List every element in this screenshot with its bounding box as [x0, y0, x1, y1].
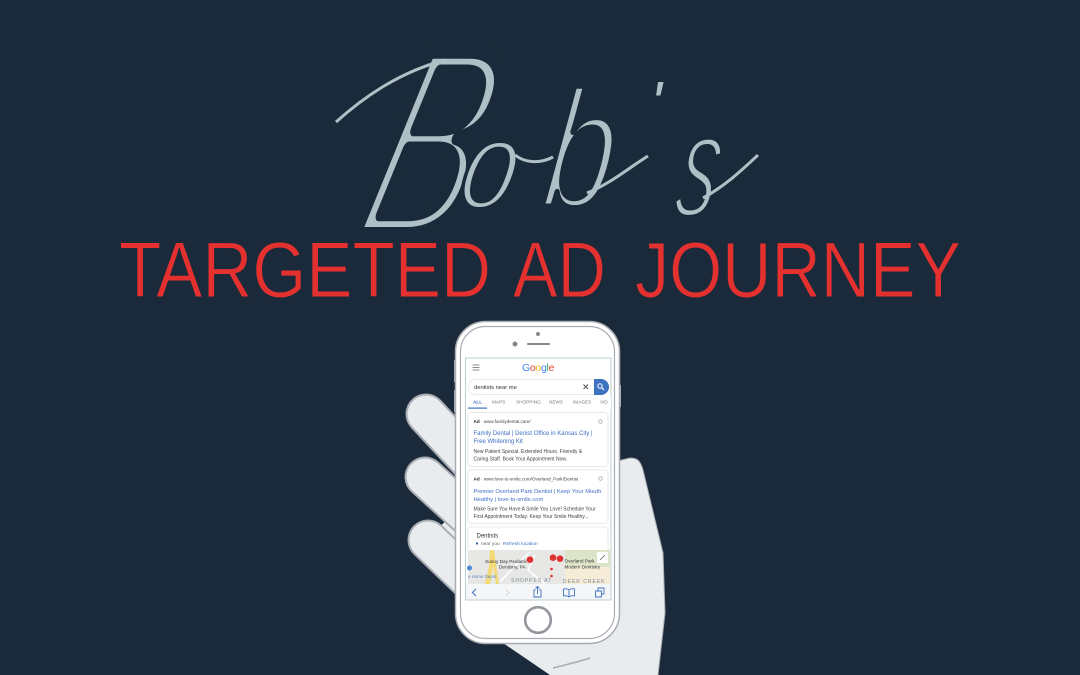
ad card 1: Caring Staff. Book Your Appointment Now.	[474, 456, 567, 462]
title: Targeted Ad Journey: TARGETED	[119, 226, 491, 314]
ad card 1: New Patient Special. Extended Hours. Friendly &	[474, 449, 583, 455]
ad card 1: Family Dental | Denist Office in Kansas City |	[474, 431, 593, 437]
Google logo: Google	[522, 362, 555, 374]
ad card 2: Healthy | love-to-smile.com	[474, 497, 543, 503]
title: Targeted Ad Journey	[119, 226, 961, 314]
title: Targeted Ad Journey: JOURNEY	[635, 226, 961, 314]
ad card 1	[468, 412, 608, 466]
palm crease	[553, 658, 590, 668]
tabs: ALL	[473, 400, 482, 404]
ad card 1: Free Whitening Kit	[474, 439, 523, 445]
finger 3	[428, 540, 480, 590]
ad card 2: Ad · www.love-to-smile.com/Overland_Park/Dentist	[474, 476, 579, 482]
script heading: Bob's: b	[536, 55, 629, 243]
script heading: Bob's: '	[650, 70, 664, 139]
title: Targeted Ad Journey: AD	[513, 226, 606, 314]
map	[467, 550, 610, 585]
ad card 2: Premier Overland Park Dentist | Keep Your Mouth	[474, 489, 601, 495]
illustration: hand holding phone	[415, 322, 665, 675]
phone body	[454, 322, 621, 644]
menu icon	[472, 365, 480, 370]
thumb outline	[618, 458, 665, 675]
map pins	[527, 554, 563, 577]
map: Overland Park	[564, 558, 595, 564]
tabs: NEWS	[549, 400, 563, 404]
ad card 2	[468, 470, 608, 524]
map: Sunny Day Pediatric	[485, 559, 528, 564]
tabs: VIDE	[600, 400, 611, 404]
ad card 2: First Appointment Today. Keep Your Smile Healthy...	[474, 514, 589, 520]
local results header: Refresh location	[503, 541, 538, 547]
map: Dentistry, PA	[499, 564, 527, 570]
ad card 2: Make Sure You Have A Smile You Love! Schedule Your	[474, 506, 596, 512]
tabs: MAPS	[492, 400, 505, 404]
script heading: Bob's: B	[336, 0, 530, 291]
finger 2	[425, 477, 480, 527]
map: DEER CREEK	[563, 579, 606, 585]
browser toolbar	[466, 584, 610, 600]
local results header: Dentists	[476, 534, 498, 540]
local results header	[468, 527, 608, 553]
tabs	[468, 397, 611, 409]
finger 1	[426, 414, 480, 472]
search bar: dentists near me	[474, 385, 517, 391]
local results header: near you	[481, 541, 500, 547]
tabs: IMAGES	[573, 400, 591, 404]
script heading: Bob's	[336, 0, 758, 291]
hand palm	[415, 458, 665, 675]
script heading: Bob's: o	[449, 96, 534, 235]
ad card 1: Ad · www.familydental.care/	[474, 419, 531, 424]
home button	[525, 607, 551, 633]
map: Modern Dentistry	[564, 564, 601, 570]
phone screen	[466, 358, 611, 600]
map: e Home Depot	[468, 574, 497, 579]
map: SHOPPES AT	[511, 578, 552, 584]
search bar	[468, 379, 609, 395]
tabs: SHOPPING	[516, 400, 541, 404]
script heading: Bob's: s	[666, 84, 736, 248]
